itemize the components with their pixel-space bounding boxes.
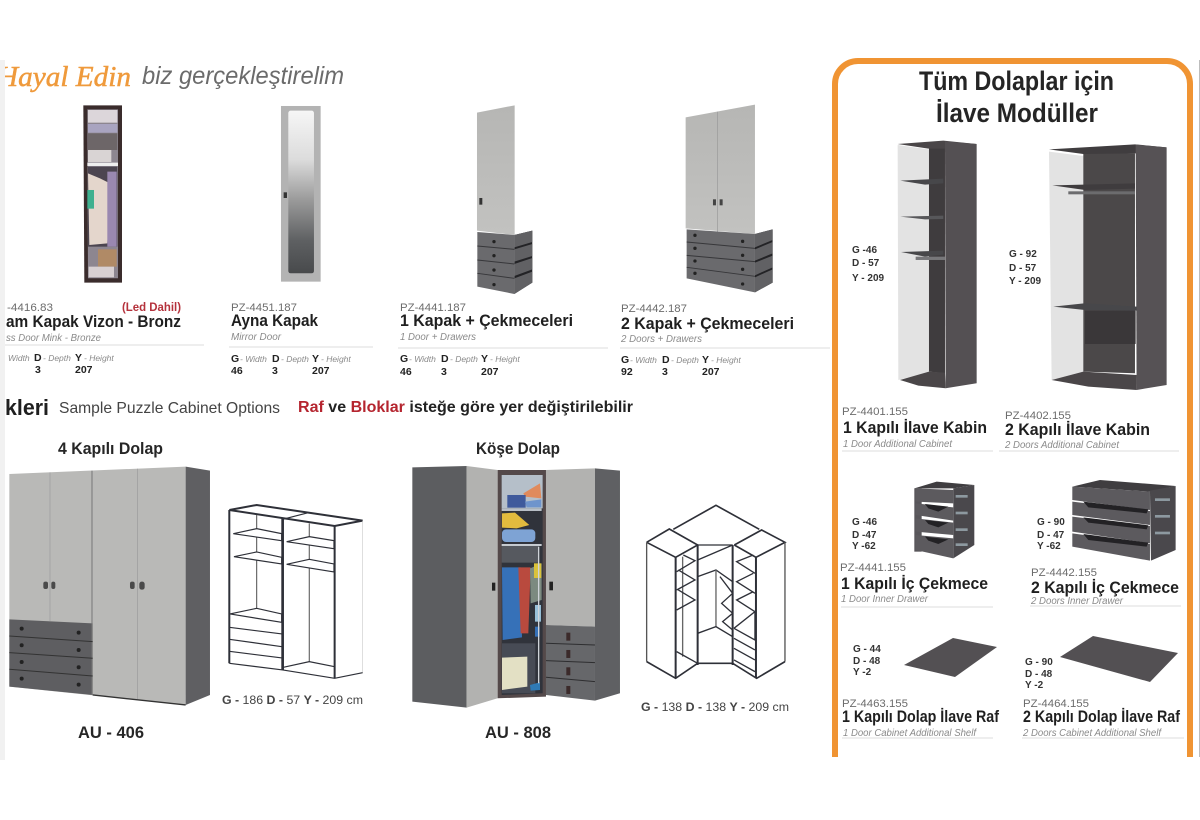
product text: mirror door: PZ-4451.187	[231, 302, 297, 314]
dimensions: cabinet 92: Y - 209	[1009, 276, 1041, 287]
panel: glass door bronze	[5, 105, 204, 376]
product text: 1 door shelf	[842, 698, 999, 739]
product text: 1 door inner drawer: 1 Door Inner Drawer	[841, 594, 929, 605]
product text: glass door: (Led Dahil)	[122, 300, 181, 314]
dimensions: shelf 44: G - 44	[853, 644, 881, 655]
dimensions: inner drawer 90: Y -62	[1037, 541, 1061, 552]
icon: corner wardrobe photo	[412, 466, 620, 708]
icon: mirror door	[281, 106, 321, 282]
product text: 1 door inner drawer: PZ-4441.155	[840, 562, 906, 574]
dimensions: inner drawer 46: G -46	[852, 517, 877, 528]
heading: four door wardrobe: 4 Kapılı Dolap	[58, 439, 163, 458]
model code: AU-808: AU - 808	[485, 723, 551, 742]
dimensions: inner drawer 46: D -47	[852, 530, 877, 541]
icon: door and drawers	[477, 105, 532, 294]
panel heading: İlave Modüller	[936, 98, 1098, 128]
product text: glass door: 207	[75, 364, 93, 376]
dimensions: inner drawer 46	[852, 517, 877, 552]
dimensions: four door wardrobe: G - 186 D - 57 Y - 209 cm	[222, 693, 363, 707]
product text: two doors plus drawers: PZ-4442.187	[621, 303, 687, 315]
dimensions: shelf 44: D - 48	[853, 656, 881, 667]
product text: two doors plus drawers: 3	[662, 366, 668, 378]
dimensions: cabinet 46	[852, 245, 884, 284]
panel: one door plus drawers	[398, 105, 608, 378]
dimensions: cabinet 46: Y - 209	[852, 273, 884, 284]
product text: one door plus drawers: - Depth	[450, 354, 478, 364]
product text: 1 door additional cabinet: 1 Kapılı İlave Kabin	[843, 418, 987, 437]
product text: one door plus drawers: 1 Kapak + Çekmeceleri	[400, 311, 573, 330]
panel border	[835, 61, 1190, 757]
product text: one door plus drawers: 46	[400, 366, 412, 378]
section heading: kleri	[5, 395, 49, 420]
product text: 2 doors shelf: 2 Doors Cabinet Additional Shelf	[1022, 728, 1162, 739]
dimensions: shelf 90	[1025, 657, 1053, 691]
dimensions: inner drawer 90: G - 90	[1037, 517, 1065, 528]
product text: glass door: -4416.83	[7, 302, 53, 314]
product text: two doors plus drawers: 207	[702, 366, 720, 378]
dimensions: shelf 44	[853, 644, 881, 678]
product text: glass door: ss Door Mink - Bronze	[6, 333, 101, 344]
product text: 2 doors additional cabinet	[999, 410, 1179, 451]
product text: one door plus drawers: - Height	[490, 354, 520, 364]
product text: 2 doors shelf	[1022, 698, 1184, 739]
header slogan: biz gerçekleştirelim	[142, 62, 344, 90]
dimensions: shelf 44: Y -2	[853, 667, 872, 678]
panel: corner wardrobe	[412, 439, 789, 742]
product text: two doors plus drawers	[620, 303, 830, 378]
dimensions: inner drawer 46: Y -62	[852, 541, 876, 552]
right page edge	[1199, 60, 1200, 757]
icon: one door cabinet	[898, 141, 977, 388]
panel heading: Tüm Dolaplar için	[919, 66, 1114, 96]
technical drawing: corner wardrobe	[647, 505, 785, 678]
icon: glass door	[83, 105, 122, 283]
dimensions: corner wardrobe: G - 138 D - 138 Y - 209 cm	[641, 700, 789, 714]
panel: two doors plus drawers	[620, 105, 830, 378]
product text: 1 door shelf: PZ-4463.155	[842, 698, 908, 710]
product text: 2 doors additional cabinet: 2 Doors Additional Cabinet	[1004, 440, 1120, 451]
icon: two door shelf	[1060, 636, 1178, 682]
product text: mirror door: 3	[272, 365, 278, 377]
product text: glass door: D	[34, 352, 42, 364]
dimensions: cabinet 92: G - 92	[1009, 249, 1037, 260]
product text: 2 doors inner drawer: 2 Doors Inner Drawer	[1030, 596, 1124, 607]
panel heading	[919, 66, 1114, 128]
panel: mirror door	[229, 106, 373, 377]
section heading: Sample Puzzle Cabinet Options	[59, 400, 280, 417]
icon: four door wardrobe photo	[9, 467, 210, 705]
product text: one door plus drawers: Y	[481, 353, 488, 365]
product text: one door plus drawers: - Width	[409, 354, 436, 364]
product text: two doors plus drawers: 2 Doors + Drawers	[620, 334, 702, 345]
product text: two doors plus drawers: D	[662, 354, 670, 366]
product text: mirror door: - Height	[321, 354, 351, 364]
product text: 1 door additional cabinet	[842, 406, 993, 451]
panel: four door wardrobe	[9, 439, 363, 742]
product text: one door plus drawers: G	[400, 353, 408, 365]
section heading: Raf ve Bloklar isteğe göre yer değiştirilebilir	[298, 399, 633, 416]
product text: mirror door: Ayna Kapak	[231, 311, 318, 330]
product text: 1 door shelf: 1 Door Cabinet Additional Shelf	[843, 728, 977, 739]
product text: 1 door shelf: 1 Kapılı Dolap İlave Raf	[842, 707, 999, 726]
product text: 1 door inner drawer	[840, 562, 993, 607]
product text: glass door: Width	[8, 353, 30, 363]
product text: 2 doors inner drawer	[1030, 567, 1181, 607]
product text: glass door: 3	[35, 364, 41, 376]
model code: AU-406: AU - 406	[78, 723, 144, 742]
product text: 2 doors additional cabinet: PZ-4402.155	[1005, 410, 1071, 422]
product text: two doors plus drawers: - Height	[711, 355, 741, 365]
icon: two door cabinet	[1049, 144, 1167, 390]
product text: mirror door: 46	[231, 365, 243, 377]
panel: additional modules	[835, 61, 1190, 757]
product text: 1 door inner drawer: 1 Kapılı İç Çekmece	[841, 574, 988, 593]
product text: glass door: - Depth	[43, 353, 71, 363]
product text: two doors plus drawers: Y	[702, 354, 709, 366]
product text: two doors plus drawers: - Width	[630, 355, 657, 365]
product text: two doors plus drawers: - Depth	[671, 355, 699, 365]
product text: two doors plus drawers: 2 Kapak + Çekmeceleri	[621, 314, 794, 333]
dimensions: shelf 90: D - 48	[1025, 669, 1053, 680]
product text: 1 door additional cabinet: PZ-4401.155	[842, 406, 908, 418]
product text: one door plus drawers: 207	[481, 366, 499, 378]
dimensions: shelf 90: Y -2	[1025, 680, 1044, 691]
dimensions: inner drawer 90	[1037, 517, 1065, 552]
product text: glass door: Y	[75, 352, 82, 364]
product text: mirror door: 207	[312, 365, 330, 377]
heading: corner wardrobe: Köşe Dolap	[476, 439, 560, 458]
product text: one door plus drawers: 1 Door + Drawers	[400, 332, 476, 343]
product text: 2 doors additional cabinet: 2 Kapılı İlave Kabin	[1005, 420, 1150, 439]
icon: double door and drawers	[686, 105, 773, 292]
dimensions: cabinet 92	[1009, 249, 1041, 287]
product text: mirror door: Mirror Door	[231, 332, 282, 343]
product text: mirror door: - Width	[240, 354, 267, 364]
product text: 2 doors inner drawer: PZ-4442.155	[1031, 567, 1097, 579]
product text: 2 doors inner drawer: 2 Kapılı İç Çekmece	[1031, 578, 1179, 597]
header slogan	[0, 61, 344, 93]
left page edge	[0, 60, 5, 760]
product text: 1 door additional cabinet: 1 Door Additional Cabinet	[843, 439, 953, 450]
product text: mirror door: D	[272, 353, 280, 365]
product text: glass door	[5, 300, 204, 376]
product text: mirror door	[229, 302, 373, 377]
dimensions: shelf 90: G - 90	[1025, 657, 1053, 668]
icon: two door inner drawer	[1072, 480, 1176, 561]
dimensions: cabinet 46: G -46	[852, 245, 877, 256]
product text: two doors plus drawers: G	[621, 354, 629, 366]
product text: 2 doors shelf: PZ-4464.155	[1023, 698, 1089, 710]
header slogan: Hayal Edin	[0, 61, 131, 93]
dimensions: cabinet 92: D - 57	[1009, 263, 1037, 274]
product text: mirror door: - Depth	[281, 354, 309, 364]
product text: mirror door: G	[231, 353, 239, 365]
product text: one door plus drawers	[398, 302, 608, 378]
product text: one door plus drawers: PZ-4441.187	[400, 302, 466, 314]
product text: one door plus drawers: D	[441, 353, 449, 365]
icon: one door shelf	[904, 638, 997, 677]
section heading	[5, 395, 633, 420]
dimensions: cabinet 46: D - 57	[852, 258, 880, 269]
technical drawing: four door wardrobe	[229, 505, 363, 678]
product text: two doors plus drawers: 92	[621, 366, 633, 378]
product text: glass door: - Height	[84, 353, 114, 363]
product text: mirror door: Y	[312, 353, 319, 365]
product text: glass door: am Kapak Vizon - Bronz	[6, 312, 181, 331]
product text: one door plus drawers: 3	[441, 366, 447, 378]
dimensions: inner drawer 90: D - 47	[1037, 530, 1065, 541]
icon: one door inner drawer	[914, 482, 974, 558]
